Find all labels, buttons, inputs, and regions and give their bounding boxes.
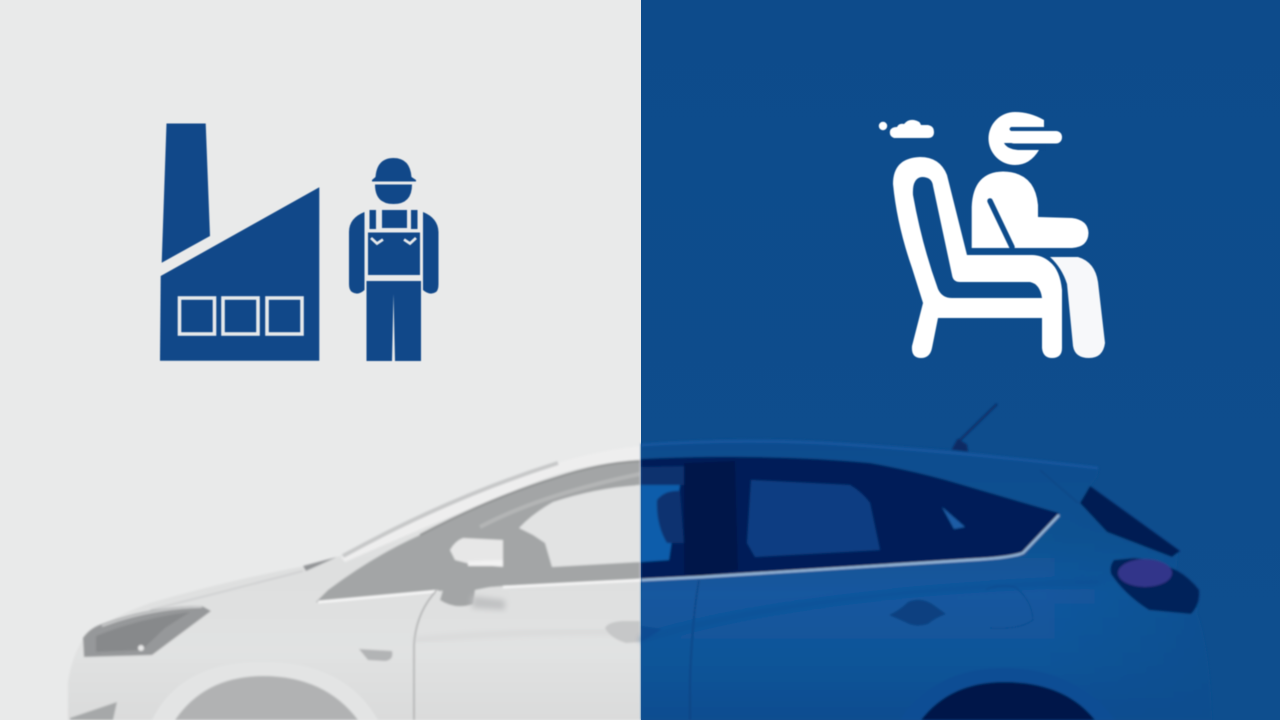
tail light: [1110, 558, 1199, 614]
fuel door: [986, 586, 1033, 628]
side window glass: [316, 461, 640, 603]
icon: worker in overalls: [349, 158, 438, 361]
wiper: [303, 557, 337, 571]
straps: [370, 210, 376, 229]
panel: right blue background: [641, 0, 1280, 720]
hatch line: [1040, 470, 1078, 503]
car right half: blue: [641, 404, 1212, 720]
upper visor gap: [1010, 127, 1048, 131]
front door handle end: [641, 626, 662, 642]
mirror: [450, 538, 503, 567]
lower visor gap: [1004, 143, 1045, 150]
factory building: [160, 187, 319, 361]
rear pane: [747, 480, 880, 557]
chrome trim: [318, 580, 640, 602]
factory windows: [180, 298, 302, 334]
icon: factory: [160, 124, 319, 361]
front wheel arch: [152, 662, 378, 720]
pocket marks: [371, 238, 383, 244]
left arm: [349, 212, 364, 294]
mirror arm: [440, 568, 505, 606]
car left half: greyscale: [68, 446, 640, 720]
trousers: [366, 281, 421, 361]
door shut line: [690, 580, 699, 720]
quarter glass reflection: [942, 507, 965, 529]
visor bar: [1008, 131, 1062, 144]
bumper vent: [70, 702, 117, 720]
car split across both panels: [68, 404, 1212, 720]
antenna: [952, 404, 997, 451]
door shut line: [414, 590, 437, 720]
body crease: [641, 582, 1100, 640]
panel: left light background: [0, 0, 640, 720]
window interior: [519, 485, 640, 567]
right arm: [423, 212, 438, 294]
head silhouette: [657, 491, 684, 543]
icon: seated passenger in armchair: [879, 112, 1105, 358]
upper front glass: [641, 466, 688, 485]
roof highlight: [641, 441, 1098, 468]
bib: [382, 210, 407, 228]
door handle: [605, 621, 640, 643]
small puff dot: [879, 122, 887, 130]
rear hatch glass: [1080, 486, 1180, 557]
face: [375, 184, 412, 204]
chrome trim: [641, 515, 1059, 580]
door handle: [889, 600, 946, 626]
torso and arm: [972, 172, 1088, 248]
overall body: [368, 232, 420, 275]
side window glass: [641, 457, 1059, 580]
leg: [1050, 257, 1105, 358]
arm gap: [990, 201, 1012, 247]
head: [988, 112, 1044, 165]
factory chimney: [162, 124, 210, 263]
armchair: [893, 157, 1062, 358]
rear wheel arch: [900, 668, 1115, 720]
pillar: [684, 461, 738, 576]
cloud: [890, 120, 934, 138]
front pane: [641, 485, 680, 562]
side marker: [359, 649, 392, 661]
headlight: [83, 606, 211, 657]
hard hat: [372, 158, 416, 182]
